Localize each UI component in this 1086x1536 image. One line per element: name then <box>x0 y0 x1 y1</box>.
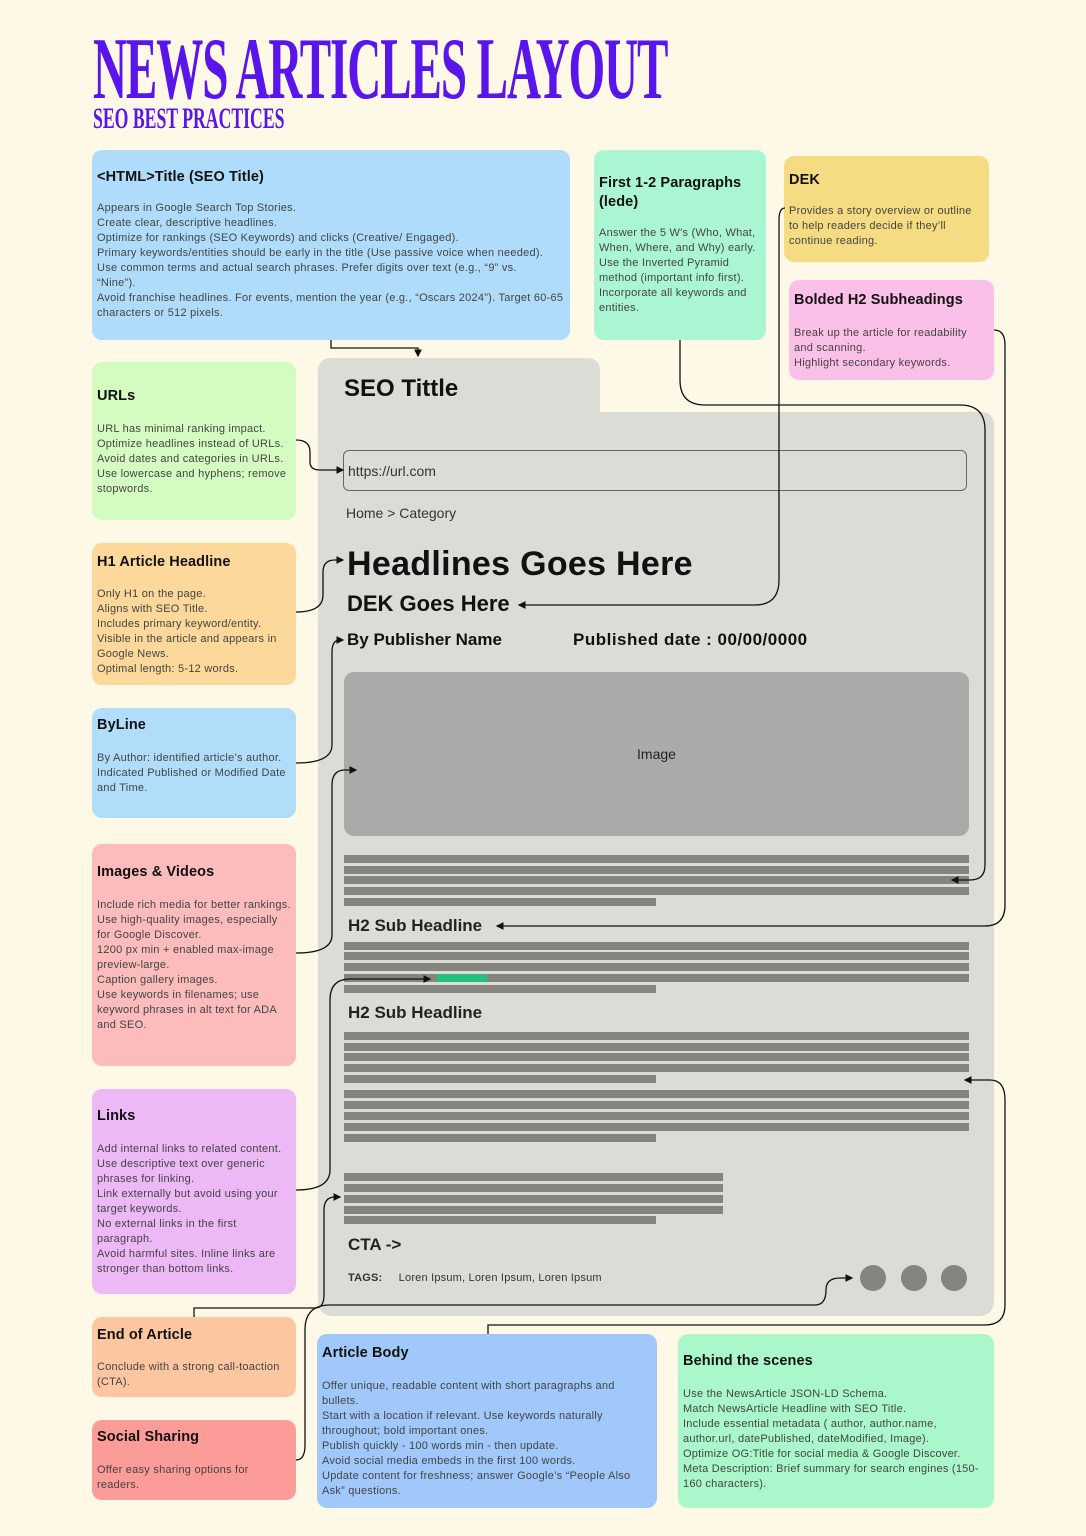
card: end of article: End of Article <box>97 1327 192 1343</box>
card: h1: Only H1 on the page. <box>97 588 206 600</box>
card: h1: Optimal length: 5-12 words. <box>97 663 238 675</box>
card: behind the scenes: Meta Description: Brief summary for search engines (150-160 characters). <box>683 1463 979 1490</box>
card: behind the scenes: Use the NewsArticle JSON-LD Schema. <box>683 1388 887 1400</box>
card: bolded h2 <box>789 280 994 380</box>
h2 sub headline 2: H2 Sub Headline <box>348 1003 482 1022</box>
card: html title: Appears in Google Search Top Stories. <box>97 202 296 214</box>
byline: By Publisher Name <box>347 630 502 649</box>
headline: Headlines Goes Here <box>347 545 693 583</box>
h2 sub headline 1: H2 Sub Headline <box>348 916 482 935</box>
card: h1 <box>92 543 296 685</box>
card: social sharing: Offer easy sharing options for readers. <box>97 1464 249 1491</box>
card: behind the scenes: Include essential metadata ( author, author.name, author.url, datePublished, dateModified, Image). <box>683 1418 937 1445</box>
card: byline <box>92 708 296 818</box>
text bars <box>344 855 969 1224</box>
card: bolded h2: Break up the article for readability and scanning. <box>794 327 967 354</box>
card: behind the scenes: Behind the scenes <box>683 1353 813 1369</box>
card: dek: DEK <box>789 172 820 188</box>
card: urls: URLs <box>97 388 135 404</box>
card: html title <box>92 150 570 340</box>
card: first paragraphs <box>594 150 766 340</box>
card: images: Images & Videos <box>97 864 214 880</box>
card: h1: Visible in the article and appears in Google News. <box>97 633 277 660</box>
card: article body <box>317 1334 657 1508</box>
card: html title: Avoid franchise headlines. For events, mention the year (e.g., “Oscars 2024”). Target 60-65 characters or 512 pixels. <box>97 292 563 319</box>
card: social sharing <box>92 1420 296 1500</box>
card: html title: Optimize for rankings (SEO Keywords) and clicks (Creative/ Engaged). <box>97 232 459 244</box>
card: article body: Offer unique, readable content with short paragraphs and bullets. <box>322 1380 615 1407</box>
card: article body: Article Body <box>322 1345 409 1361</box>
card: h1: H1 Article Headline <box>97 554 231 570</box>
card: html title: <HTML>Title (SEO Title) <box>97 169 264 185</box>
card: end of article: Conclude with a strong call-toaction (CTA). <box>97 1361 280 1388</box>
breadcrumb: Home > Category <box>346 505 456 521</box>
tab <box>318 358 600 428</box>
card: links <box>92 1089 296 1294</box>
card: images <box>92 844 296 1066</box>
card: byline: Indicated Published or Modified Date and Time. <box>97 767 286 794</box>
card: social sharing: Social Sharing <box>97 1429 199 1445</box>
card: images: Include rich media for better rankings. <box>97 899 291 911</box>
published date: Published date : 00/00/0000 <box>573 630 808 649</box>
card: links: Add internal links to related content. Use descriptive text over generic phrases for linking. <box>97 1143 281 1185</box>
subtitle: SEO BEST PRACTICES <box>93 102 285 135</box>
card: behind the scenes: Optimize OG:Title for social media & Google Discover. <box>683 1448 961 1460</box>
card: byline: By Author: identified article’s author. <box>97 752 281 764</box>
tags: TAGS: Loren Ipsum, Loren Ipsum, Loren Ipsum <box>348 1272 602 1284</box>
card: article body: Update content for freshness; answer Google’s “People Also Ask” questions. <box>322 1470 630 1497</box>
image placeholder: Image <box>637 746 676 762</box>
card: html title: Primary keywords/entities should be early in the title (Use passive voice when needed). <box>97 247 543 259</box>
card: links: No external links in the first paragraph. <box>97 1218 237 1245</box>
url bar <box>343 450 967 491</box>
card: dek: Provides a story overview or outline to help readers decide if they’ll continue reading. <box>789 205 972 247</box>
card: h1: Aligns with SEO Title. <box>97 603 208 615</box>
card: first paragraphs: Answer the 5 W's (Who, What, When, Where, and Why) early. Use the Inverted Pyramid method (important info first). Incorporate all keywords and entities. <box>599 227 756 314</box>
card: urls <box>92 362 296 520</box>
card: bolded h2: Bolded H2 Subheadings <box>794 292 963 308</box>
card: images: Caption gallery images. <box>97 974 218 986</box>
card: images: Use high-quality images, especially for Google Discover. <box>97 914 278 941</box>
title: NEWS ARTICLES LAYOUT <box>93 21 667 118</box>
card: links: Links <box>97 1108 135 1124</box>
card: links: Avoid harmful sites. Inline links are stronger than bottom links. <box>97 1248 275 1275</box>
card: images: Use keywords in filenames; use keyword phrases in alt text for ADA and SEO. <box>97 989 276 1031</box>
card: end of article <box>92 1317 296 1397</box>
seo title label: SEO Tittle <box>344 375 458 402</box>
card: behind the scenes: Match NewsArticle Headline with SEO Title. <box>683 1403 906 1415</box>
card: dek <box>784 156 989 262</box>
cta: CTA -> <box>348 1235 401 1254</box>
card: behind the scenes <box>678 1334 994 1508</box>
card: urls: URL has minimal ranking impact. Optimize headlines instead of URLs. Avoid dates and categories in URLs. Use lowercase and hyphens; remove stopwords. <box>97 423 286 495</box>
card: images: 1200 px min + enabled max-image preview-large. <box>97 944 274 971</box>
card: article body: Start with a location if relevant. Use keywords naturally throughout; bold important ones. <box>322 1410 603 1437</box>
card: links: Link externally but avoid using your target keywords. <box>97 1188 278 1215</box>
card: first paragraphs: First 1-2 Paragraphs (lede) <box>599 175 741 210</box>
image placeholder <box>344 672 969 836</box>
card: html title: Use common terms and actual search phrases. Prefer digits over text (e.g., “9” vs. <box>97 262 517 274</box>
card: byline: ByLine <box>97 717 146 733</box>
card: article body: Publish quickly - 100 words min - then update. <box>322 1440 559 1452</box>
card: h1: Includes primary keyword/entity. <box>97 618 261 630</box>
card: html title: Create clear, descriptive headlines. <box>97 217 277 229</box>
card: bolded h2: Highlight secondary keywords. <box>794 357 950 369</box>
card: article body: Avoid social media embeds in the first 100 words. <box>322 1455 576 1467</box>
mockup panel <box>318 358 994 1316</box>
dek: DEK Goes Here <box>347 591 510 616</box>
card: html title: “Nine”). <box>97 277 136 289</box>
url bar: https://url.com <box>348 463 436 479</box>
social share circles <box>860 1265 967 1291</box>
